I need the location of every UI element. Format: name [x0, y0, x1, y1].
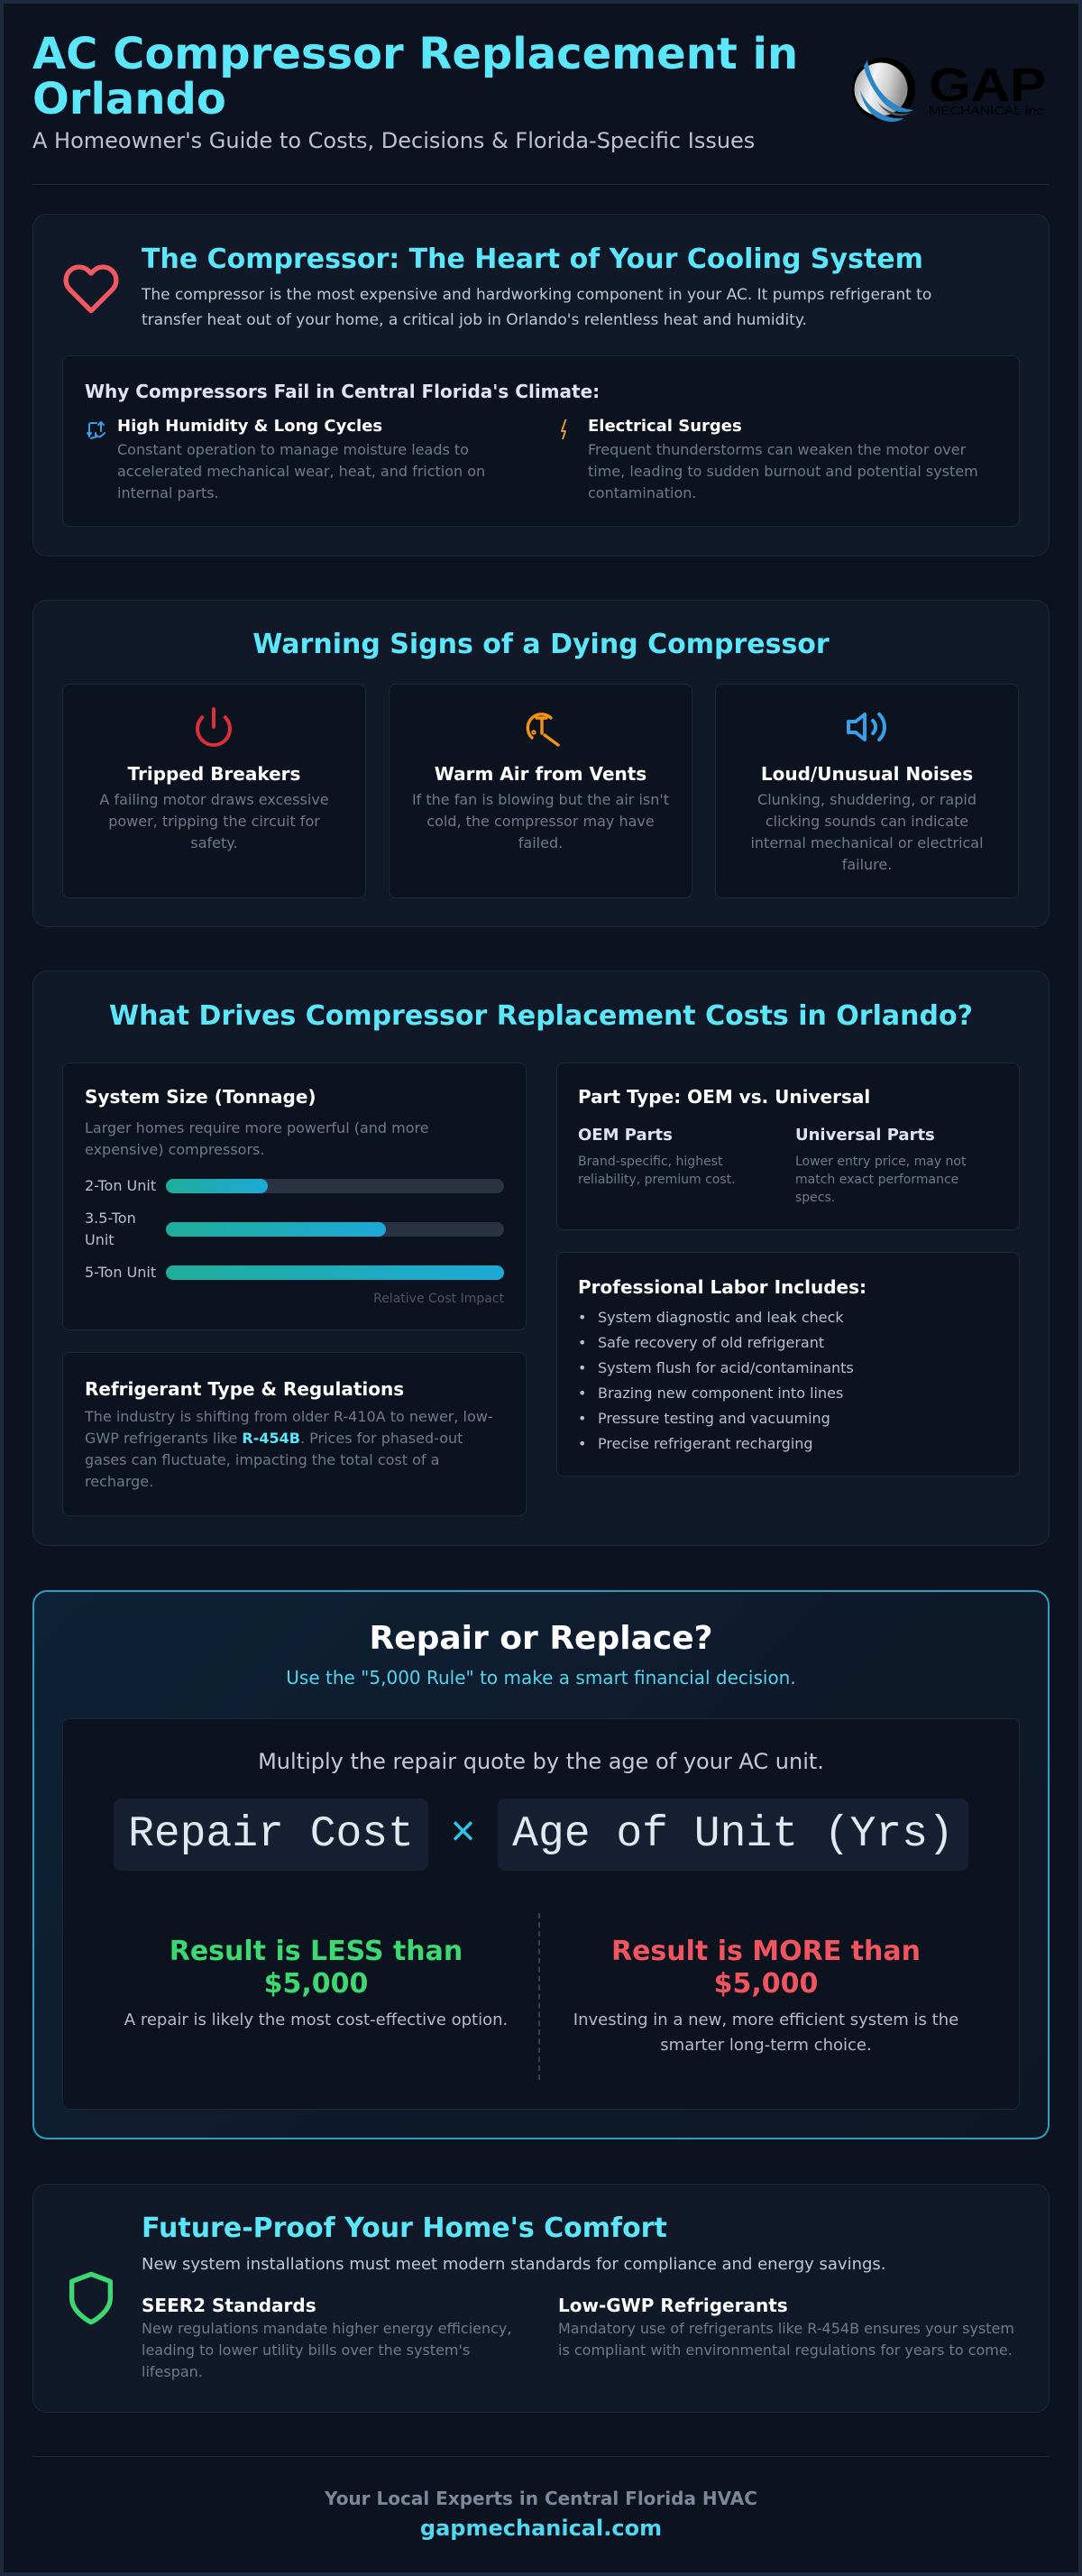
heading: warning signs: Warning Signs of a Dying Compressor [252, 629, 830, 660]
text: compressor description: transfer heat out of your home, a critical job in Orlando's relentless heat and humidity. [142, 311, 807, 329]
bar: 5-ton [166, 1265, 504, 1280]
list: labor items: System diagnostic and leak check [598, 1309, 844, 1326]
card: labor [556, 1252, 1020, 1477]
bar: 2-ton [166, 1179, 504, 1193]
panel: warning signs [32, 600, 1050, 927]
text: low-GWP: is compliant with environmental regulations for years to come. [558, 2341, 1013, 2359]
text: electrical surges: contamination. [588, 484, 697, 501]
card: refrigerant [62, 1352, 527, 1516]
text: electrical surges [588, 441, 978, 501]
text: A failing motor draws excessive [99, 791, 329, 808]
caption: Relative Cost Impact [373, 1292, 504, 1306]
title: AC Compressor Replacement in [32, 29, 798, 79]
heading: why compressors fail: Why Compressors Fail in Central Florida's Climate: [85, 381, 600, 402]
icon: GAP Mechanical logo [852, 58, 1046, 122]
text: Larger homes require more powerful (and more [85, 1119, 429, 1136]
text: electrical surges: time, leading to sudden burnout and potential system [588, 463, 978, 480]
heading: Loud/Unusual Noises [761, 763, 973, 785]
label: 5-ton: 5-Ton Unit [85, 1264, 156, 1281]
icon: power [196, 707, 232, 747]
list: labor items: • [578, 1309, 586, 1326]
heading: high humidity: High Humidity & Long Cycles [117, 417, 382, 436]
result: more than [573, 1936, 958, 2055]
heading: less: Result is LESS than [170, 1936, 463, 1967]
bar: 3.5-ton [166, 1222, 504, 1237]
list: labor items: • [578, 1435, 586, 1452]
text: multiply: Multiply the repair quote by the age of your AC unit. [258, 1749, 824, 1774]
text: The industry is shifting from older R-410A to newer, low- [85, 1408, 493, 1425]
text: internal mechanical or electrical [750, 834, 984, 851]
formula: age of unit [498, 1799, 968, 1871]
text: compressor description [141, 286, 931, 329]
heading: less [170, 1936, 463, 2000]
text: SEER2 [142, 2320, 511, 2380]
heading: Tripped Breakers [128, 763, 300, 785]
heading: future-proof: Future-Proof Your Home's Comfort [142, 2213, 667, 2244]
heading: cost drivers: What Drives Compressor Replacement Costs in Orlando? [109, 1000, 973, 1032]
label: 3.5-ton: Unit [85, 1231, 115, 1248]
text: 5,000 rule: Use the "5,000 Rule" to make a smart financial decision. [286, 1667, 796, 1688]
text: failure. [842, 856, 892, 873]
text: failed. [518, 834, 563, 851]
formula: multiply sign: × [450, 1810, 476, 1859]
text: more [573, 2010, 958, 2055]
text: future-proof: New system installations must meet modern standards for compliance and energy savings. [142, 2255, 886, 2274]
text: cold, the compressor may have [426, 813, 655, 830]
heading: more: Result is MORE than [611, 1936, 921, 1967]
text: universal: match exact performance [795, 1173, 958, 1187]
text: high humidity: internal parts. [117, 484, 219, 501]
text: less: A repair is likely the most cost-effective option. [124, 2010, 508, 2029]
text [85, 1408, 493, 1490]
text: Clunking, shuddering, or rapid [757, 791, 977, 808]
title [32, 29, 798, 124]
icon: gauge [527, 713, 560, 747]
icon: shield [69, 2271, 113, 2325]
heading: compressor: The Compressor: The Heart of Your Cooling System [142, 244, 923, 275]
icon: heart [63, 264, 119, 314]
heading: Professional Labor Includes: [578, 1276, 867, 1298]
label: 2-ton: 2-Ton Unit [85, 1177, 156, 1194]
text: GWP refrigerants like R-454B. Prices for phased-out [85, 1430, 463, 1447]
heading: more: $5,000 [714, 1968, 818, 2000]
text: gases can fluctuate, impacting the total cost of a [85, 1451, 439, 1468]
panel: repair or replace [32, 1590, 1050, 2139]
footer [325, 2488, 757, 2541]
card: warm air [389, 684, 692, 898]
card: part type [556, 1063, 1020, 1230]
heading: Warm Air from Vents [435, 763, 646, 785]
panel: cost drivers [32, 971, 1050, 1546]
list: labor items: System flush for acid/contaminants [598, 1359, 854, 1376]
text: SEER2: leading to lower utility bills over the system's [142, 2341, 470, 2359]
list: labor items: • [578, 1359, 586, 1376]
text: SEER2: lifespan. [142, 2363, 203, 2380]
list: labor items: Pressure testing and vacuuming [598, 1410, 830, 1427]
text: universal: Lower entry price, may not [795, 1155, 966, 1169]
text: safety. [190, 834, 238, 851]
text: low-GWP: Mandatory use of refrigerants like R-454B ensures your system [558, 2320, 1014, 2337]
footer url: gapmechanical.com [420, 2516, 662, 2541]
heading: repair or replace: Repair or Replace? [369, 1620, 713, 1657]
heading: Refrigerant Type & Regulations [85, 1378, 404, 1400]
icon: GAP Mechanical logo: MECHANICAL inc [929, 105, 1043, 117]
footer tagline: Your Local Experts in Central Florida HVAC [325, 2488, 757, 2509]
panel: formula [62, 1718, 1020, 2110]
text: more: Investing in a new, more efficient system is the [573, 2010, 958, 2029]
card: system size [62, 1063, 527, 1330]
bar chart: relative cost [85, 1177, 504, 1281]
text: high humidity [117, 441, 485, 501]
list: labor items: Brazing new component into lines [598, 1385, 843, 1402]
text: compressor description: The compressor is the most expensive and hardworking component in your AC. It pumps refrigerant to [142, 286, 931, 304]
subtitle: A Homeowner's Guide to Costs, Decisions & Florida-Specific Issues [32, 128, 755, 153]
icon: GAP Mechanical logo: GAP [929, 60, 1046, 112]
text: universal [795, 1155, 967, 1205]
text [85, 1119, 429, 1158]
text: power, tripping the circuit for [108, 813, 320, 830]
heading: Part Type: OEM vs. Universal [578, 1086, 870, 1108]
panel: the compressor [32, 214, 1050, 557]
heading: low-GWP: Low-GWP Refrigerants [558, 2295, 788, 2316]
text: clicking sounds can indicate [766, 813, 968, 830]
icon: speaker [847, 713, 886, 741]
card: noises [715, 684, 1019, 898]
formula: repair cost: Repair Cost [128, 1810, 414, 1859]
text: If the fan is blowing but the air isn't [412, 791, 669, 808]
card: tripped breakers [62, 684, 366, 898]
label: 3.5-ton [85, 1210, 136, 1248]
text: SEER2: New regulations mandate higher energy efficiency, [142, 2320, 511, 2337]
text: low-GWP [558, 2320, 1014, 2359]
text: recharge. [85, 1473, 153, 1490]
heading: SEER2: SEER2 Standards [142, 2295, 316, 2316]
text: expensive) compressors. [85, 1141, 264, 1158]
list: labor items: • [578, 1334, 586, 1351]
formula: age of unit: Age of Unit (Yrs) [512, 1810, 954, 1859]
list: labor items: • [578, 1385, 586, 1402]
panel: why compressors fail [62, 355, 1020, 527]
text: oem [578, 1155, 736, 1187]
text: high humidity: accelerated mechanical wear, heat, and friction on [117, 463, 485, 480]
title: Orlando [32, 74, 226, 124]
list: labor items: Precise refrigerant recharging [598, 1435, 813, 1452]
icon: lightning bolt [561, 419, 566, 440]
list: labor items [578, 1309, 854, 1452]
heading: less: $5,000 [264, 1968, 368, 2000]
text [99, 791, 329, 851]
text: universal: specs. [795, 1191, 835, 1205]
heading: universal: Universal Parts [795, 1126, 935, 1145]
result: less than [124, 1936, 508, 2029]
heading: System Size (Tonnage) [85, 1086, 316, 1108]
text: oem: Brand-specific, highest [578, 1155, 722, 1169]
heading: oem: OEM Parts [578, 1126, 673, 1145]
text: electrical surges: Frequent thunderstorms can weaken the motor over [588, 441, 966, 458]
heading: more [611, 1936, 921, 2000]
heading: electrical surges: Electrical Surges [588, 417, 742, 436]
text [412, 791, 669, 851]
icon: humidity cycle [87, 420, 105, 439]
text: oem: reliability, premium cost. [578, 1173, 736, 1187]
panel: future-proof [32, 2184, 1050, 2413]
text: more: smarter long-term choice. [660, 2036, 872, 2055]
list: labor items: • [578, 1410, 586, 1427]
text: high humidity: Constant operation to manage moisture leads to [117, 441, 469, 458]
label: 3.5-ton: 3.5-Ton [85, 1210, 136, 1227]
formula: repair cost [114, 1799, 428, 1871]
text [750, 791, 984, 873]
list: labor items: Safe recovery of old refrigerant [598, 1334, 824, 1351]
